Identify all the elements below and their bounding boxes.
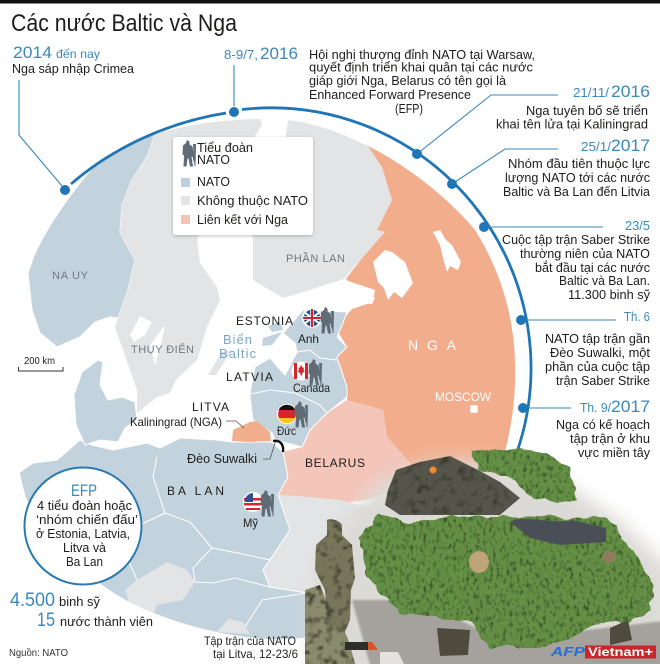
timeline arc	[71, 108, 531, 449]
country labels: THỤY ĐIỂN	[131, 343, 194, 356]
EFP callout: Ba Lan	[66, 554, 103, 569]
legend: NATO	[197, 152, 230, 167]
statistics	[10, 590, 153, 631]
legend	[173, 137, 313, 235]
event: Warsaw summit: quyết định triển khai quân tại các nước	[309, 60, 533, 74]
Suwalki gap	[273, 441, 283, 452]
event: September 2017: Th. 9/	[580, 400, 611, 415]
Norway	[28, 134, 154, 346]
battalion: UK	[298, 307, 334, 346]
logo: AFP Vietnam+	[550, 644, 656, 659]
country labels: LITVA	[192, 400, 229, 414]
event: 25/1/2017: lượng NATO tới các nước	[505, 170, 650, 185]
Denmark	[74, 360, 137, 445]
Central Europe and Poland	[20, 438, 305, 640]
event: 23/5: bắt đầu tại các nước	[535, 260, 650, 275]
statistics: binh sỹ	[59, 594, 100, 609]
road marking	[380, 652, 404, 664]
event: 21/11/2016: 2016	[611, 82, 650, 101]
battalion: Canada	[292, 359, 330, 395]
photo caption	[204, 634, 298, 661]
scale bar	[18, 356, 63, 371]
EFP callout: 4 tiểu đoàn hoặc	[37, 498, 132, 513]
photo background fade	[310, 460, 660, 664]
country labels: ESTONIA	[236, 314, 293, 328]
legend: Không thuộc NATO	[197, 193, 308, 208]
event: June: trận Saber Strike	[556, 373, 650, 388]
event: 23/5: 11.300 binh sỹ	[568, 287, 650, 302]
Gulf of Finland	[340, 278, 375, 304]
Lake Ladoga	[373, 250, 413, 300]
turret foliage	[470, 448, 577, 505]
leader lines	[19, 65, 616, 408]
EFP callout: EFP	[71, 481, 97, 500]
country labels: LATVIA	[226, 370, 273, 384]
statistics: nước thành viên	[60, 614, 153, 629]
event: 2014 Crimea: Nga sáp nhập Crimea	[12, 61, 135, 76]
source: Nguồn: NATO	[9, 647, 68, 659]
battalion: UK: Anh	[298, 332, 319, 346]
country labels: NGA	[408, 337, 457, 353]
Kaliningrad	[232, 421, 271, 442]
country labels: BELARUS	[305, 456, 365, 470]
Small grey country	[217, 619, 250, 634]
event: 21/11/2016	[496, 82, 650, 132]
country labels: PHẦN LAN	[286, 252, 345, 265]
EFP callout: ở Estonia, Latvia,	[36, 526, 130, 541]
logo: AFP Vietnam+: Vietnam+	[588, 645, 653, 659]
crouching soldier	[305, 585, 355, 664]
country labels: MOSCOW	[435, 390, 492, 404]
country labels: BA LAN	[167, 484, 224, 498]
turret equipment	[385, 456, 520, 515]
crew helmet	[602, 551, 616, 563]
EFP callout: ‘nhóm chiến đấu’	[36, 512, 138, 527]
event: Warsaw summit: 8-9/7,	[224, 47, 258, 62]
orange light	[430, 466, 436, 474]
event: June: phần của cuộc tập	[545, 359, 650, 374]
scale bar: 200 km	[24, 356, 55, 367]
Moscow marker	[470, 405, 478, 413]
Finland	[250, 110, 392, 298]
battalion: Germany: Đức	[277, 424, 296, 438]
photo: armoured vehicle with camouflage	[305, 448, 660, 664]
logo: AFP Vietnam+: AFP	[550, 644, 585, 659]
statistics: 4.500	[10, 590, 55, 611]
country labels: Đèo Suwalki	[187, 451, 257, 466]
event: June: Th. 6	[624, 309, 650, 324]
event: 25/1/2017: 2017	[611, 136, 650, 155]
timeline dots	[60, 107, 528, 413]
legend: Tiểu đoàn	[197, 140, 253, 155]
Baltic states	[250, 310, 347, 447]
standing soldier	[315, 519, 355, 632]
event: June	[545, 309, 650, 388]
country labels	[52, 252, 492, 498]
event: 25/1/2017: 25/1/	[581, 139, 611, 154]
title: Các nước Baltic và Nga	[11, 10, 238, 37]
event: Warsaw summit: (EFP)	[395, 101, 423, 116]
track	[437, 620, 632, 656]
event: September 2017: tập trận ở khu	[570, 431, 650, 446]
event: Warsaw summit: giáp giới Nga, Belarus có tên gọi là	[309, 73, 507, 88]
Kaliningrad and Suwalki leaders	[226, 421, 283, 459]
legend: NATO	[197, 174, 230, 189]
event: Warsaw summit: Enhanced Forward Presence	[309, 87, 471, 102]
event: Warsaw summit	[224, 44, 535, 116]
commander helmet	[469, 551, 489, 573]
event: 25/1/2017	[503, 136, 651, 199]
event: 2014 Crimea: đến nay	[56, 47, 100, 61]
Germany Poland borders	[120, 457, 307, 630]
Lake Onega	[433, 230, 461, 272]
Baltic internal borders	[250, 350, 337, 413]
event: 21/11/2016: 21/11/	[573, 85, 609, 100]
event: September 2017: Nga có kế hoạch	[556, 417, 650, 432]
event: June: Đèo Suwalki, một	[550, 345, 650, 360]
battalion: Germany	[277, 401, 308, 438]
event: 23/5: 23/5	[625, 218, 650, 233]
event: Warsaw summit: Hội nghị thượng đỉnh NATO tại Warsaw,	[309, 47, 535, 62]
event: 25/1/2017: Baltic và Ba Lan đến Litvia	[503, 184, 651, 199]
event: June: NATO tập trận gần	[545, 331, 650, 346]
battalion: USA	[243, 490, 274, 530]
hatch	[510, 519, 606, 545]
legend: Liên kết với Nga	[197, 212, 289, 227]
event: September 2017: 2017	[611, 397, 650, 416]
country labels: Kaliningrad (NGA)	[130, 415, 222, 429]
Belarus	[278, 400, 410, 505]
road	[352, 600, 660, 664]
battalion: Canada: Canada	[293, 381, 330, 395]
event: 23/5: Baltic và Ba Lan.	[559, 273, 650, 288]
event: September 2017: vực miền tây	[578, 445, 650, 460]
legend: battalion icon	[182, 140, 196, 166]
country labels: NA UY	[52, 270, 89, 282]
Sweden lakes	[130, 316, 165, 365]
country labels: Baltic	[219, 346, 256, 361]
event: 21/11/2016: khai tên lửa tại Kaliningrad	[496, 116, 648, 132]
photo caption: tại Litva, 12-23/6	[213, 647, 298, 661]
top black bar	[0, 0, 660, 4]
event: 23/5: Cuộc tập trận Saber Strike	[502, 232, 650, 247]
event: September 2017	[556, 397, 650, 460]
Gotland	[208, 350, 232, 375]
statistics: 15	[37, 610, 55, 631]
Austria	[125, 562, 195, 613]
photo caption: Tập trận của NATO	[204, 634, 296, 648]
Estonian islands	[262, 322, 283, 346]
hull foliage	[359, 515, 652, 648]
battalion: USA: Mỹ	[243, 516, 258, 530]
event: Warsaw summit: 2016	[260, 44, 298, 63]
Ukraine	[264, 495, 364, 592]
event: 23/5	[502, 218, 650, 302]
event: 2014 Crimea: 2014	[13, 43, 52, 62]
event: 21/11/2016: Nga tuyên bố sẽ triển	[526, 103, 648, 118]
map of the Baltic region	[20, 119, 516, 640]
EFP callout	[24, 468, 142, 584]
event: 23/5: thường niên của NATO	[520, 246, 650, 261]
event: 25/1/2017: Nhóm đầu tiên thuộc lực	[508, 156, 650, 171]
red marker	[345, 642, 378, 650]
Russia	[338, 146, 516, 478]
EFP callout: Litva và	[63, 540, 107, 555]
country labels: Biển	[223, 332, 252, 347]
event: 2014 Crimea	[12, 43, 135, 76]
Sweden	[115, 110, 262, 413]
